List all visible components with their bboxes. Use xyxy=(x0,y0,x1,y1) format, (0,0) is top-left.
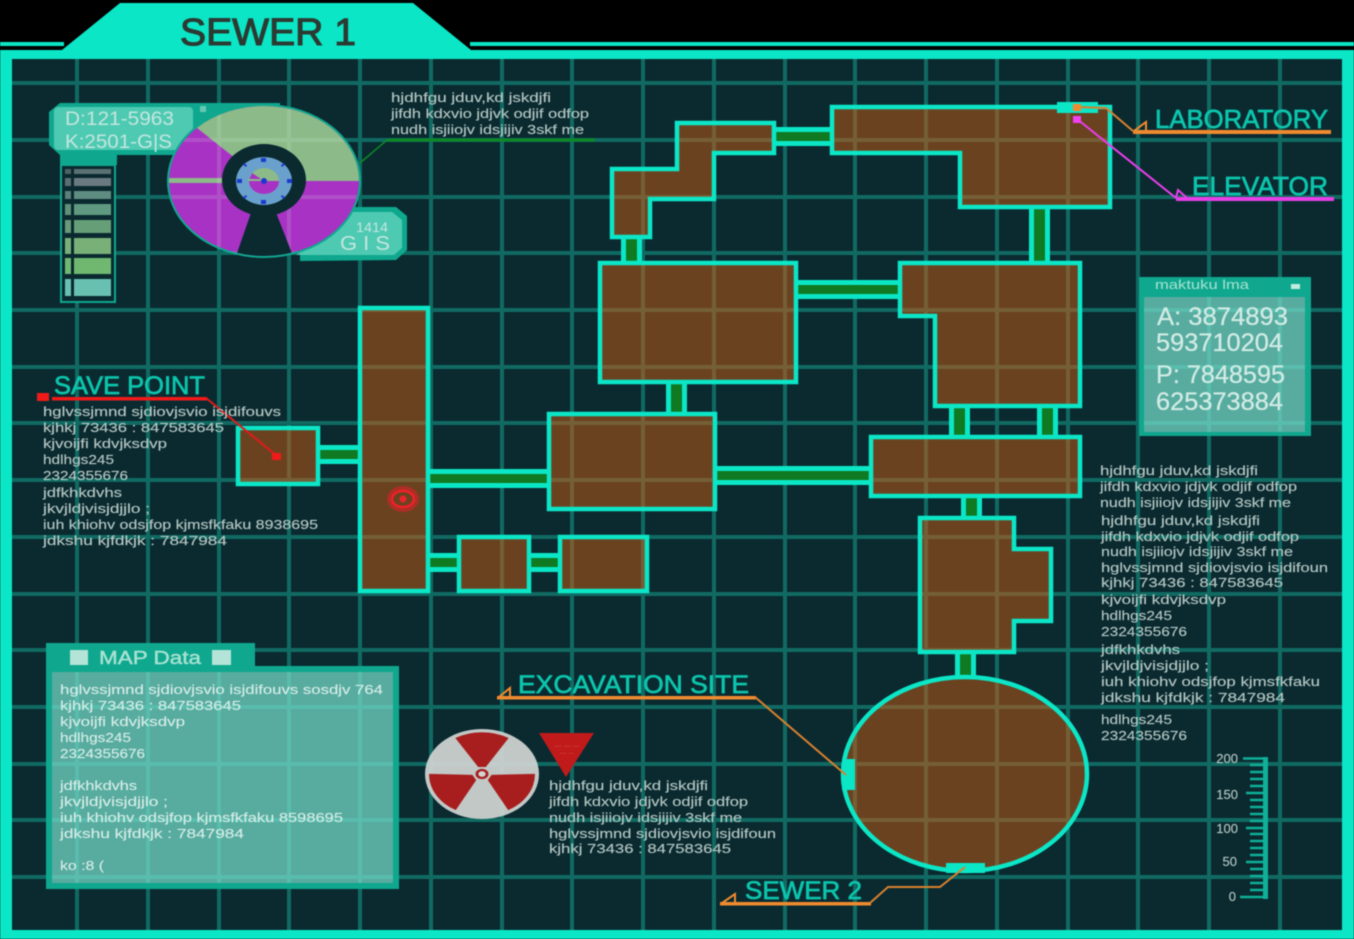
panel text: ko :8 ( xyxy=(60,858,105,873)
level bars xyxy=(61,165,115,302)
panel text: kjvoijfi kdvjksdvp xyxy=(60,714,185,729)
text block: excavation notes xyxy=(548,778,776,856)
icon: warning triangle xyxy=(539,733,594,777)
text block: excavation notes: kjhkj 73436 : 847583645 xyxy=(549,841,731,856)
dial gauge xyxy=(160,100,365,260)
icon: radiation symbol xyxy=(423,729,541,819)
panel: GIS plate: 1414 xyxy=(356,219,388,235)
text block: save point details: kjvoijfi kdvjksdvp xyxy=(43,436,167,451)
panel numbers: 593710204 xyxy=(1156,329,1283,357)
label: save point xyxy=(37,372,281,460)
label: elevator xyxy=(1073,116,1334,201)
text block: right column: 2324355676 xyxy=(1101,728,1187,743)
panel: GIS plate xyxy=(296,207,407,261)
text block: save point details: jkvjldjvisjdjjlo ; xyxy=(42,501,150,516)
label: elevator: ELEVATOR xyxy=(1192,171,1328,201)
text block: right column: jdkshu kjfdkjk : 7847984 xyxy=(1100,690,1285,705)
map room outlines xyxy=(238,107,1110,871)
panel: ID plate xyxy=(49,103,280,165)
panel: MAP Data xyxy=(46,643,396,886)
panel text: jdkshu kjfdkjk : 7847984 xyxy=(59,826,244,841)
ruler labels xyxy=(1216,751,1238,904)
text block: top note: jifdh kdxvio jdjvk odjif odfop xyxy=(390,106,589,121)
text block: right column: 2324355676 xyxy=(1101,624,1187,639)
panel numbers: A: 3874893 xyxy=(1157,303,1288,331)
text block: right column: hjdhfgu jduv,kd jskdjfi xyxy=(1100,463,1258,478)
text block: right column: kjhkj 73436 : 847583645 xyxy=(1101,575,1283,590)
label: sewer 2: SEWER 2 xyxy=(745,877,862,905)
text block: save point details: jdfkhkdvhs xyxy=(42,485,123,500)
panel text: jdfkhkdvhs xyxy=(59,778,138,793)
scale ruler xyxy=(1216,751,1268,904)
text block: right column: jifdh kdxvio jdjvk odjif odfop xyxy=(1099,479,1297,494)
ruler labels: 0 xyxy=(1229,889,1236,904)
map room floors xyxy=(238,107,1110,871)
ID text: K:2501-G|S xyxy=(65,132,172,153)
ruler labels: 100 xyxy=(1216,821,1238,836)
text block: save point details: hdlhgs245 xyxy=(43,452,114,467)
map corridors xyxy=(318,127,1058,680)
label: excavation site: EXCAVATION SITE xyxy=(518,671,749,699)
text block: right column: iuh khiohv odsjfop kjmsfkfaku xyxy=(1101,674,1320,689)
panel tab xyxy=(46,643,255,668)
panel text: iuh khiohv odsjfop kjmsfkfaku 8598695 xyxy=(60,810,343,825)
title: SEWER 1 xyxy=(180,12,356,54)
text block: save point details xyxy=(42,404,318,548)
panel text: jkvjldjvisjdjjlo ; xyxy=(59,794,168,809)
room doors xyxy=(842,102,1098,873)
label: laboratory: LABORATORY xyxy=(1155,104,1328,134)
ruler labels: 200 xyxy=(1216,751,1238,766)
panel text: hglvssjmnd sjdiovjsvio isjdifouvs sosdjv 764 xyxy=(60,682,383,697)
text block: save point details: jdkshu kjfdkjk : 7847984 xyxy=(42,533,227,548)
panel: maktuku lma: maktuku lma xyxy=(1155,277,1250,292)
icon: warning triangle: --- -- xyxy=(560,750,574,755)
text block: top note: hjdhfgu jduv,kd jskdjfi xyxy=(391,90,551,105)
panel text: hdlhgs245 xyxy=(60,730,131,745)
text block: right column: hjdhfgu jduv,kd jskdjfi xyxy=(1101,513,1260,528)
ruler labels: 150 xyxy=(1216,787,1238,802)
panel numbers: 625373884 xyxy=(1156,388,1283,416)
text block: right column: hdlhgs245 xyxy=(1101,712,1172,727)
green leader line xyxy=(360,140,595,163)
text block: excavation notes: hglvssjmnd sjdiovjsvio isjdifoun xyxy=(549,826,776,841)
label: excavation site xyxy=(497,671,846,775)
text block: top note xyxy=(390,90,589,137)
text block: right column: jifdh kdxvio jdjvk odjif odfop xyxy=(1100,529,1299,544)
label: sewer 2 xyxy=(720,867,965,906)
panel tab: MAP Data xyxy=(99,648,202,668)
ID text: D:121-5963 xyxy=(65,109,174,130)
text block: right column: kjvoijfi kdvjksdvp xyxy=(1101,592,1226,607)
panel text: kjhkj 73436 : 847583645 xyxy=(60,698,241,713)
text block: save point details: 2324355676 xyxy=(43,468,128,483)
red target marker xyxy=(387,486,419,512)
panel text: 2324355676 xyxy=(60,746,145,761)
text block: excavation notes: nudh isjiiojv idsjijiv 3skf me xyxy=(549,810,742,825)
ID text xyxy=(65,109,174,153)
text block: top note: nudh isjiiojv idsjijiv 3skf me xyxy=(391,122,584,137)
panel numbers xyxy=(1156,303,1288,416)
panel: GIS plate: G I S xyxy=(340,233,390,255)
text block: right column: nudh isjiiojv idsjijiv 3skf me xyxy=(1100,495,1291,510)
label: save point: SAVE POINT xyxy=(54,372,205,400)
text block: right column: hglvssjmnd sjdiovjsvio isjdifoun xyxy=(1101,560,1328,575)
text block: excavation notes: hjdhfgu jduv,kd jskdjfi xyxy=(549,778,708,793)
label: laboratory xyxy=(1073,104,1331,134)
text block: save point details: kjhkj 73436 : 847583645 xyxy=(43,420,224,435)
text block: right column: hdlhgs245 xyxy=(1101,608,1172,623)
text block: save point details: iuh khiohv odsjfop kjmsfkfaku 8938695 xyxy=(43,517,318,532)
panel text xyxy=(59,682,383,873)
ruler labels: 50 xyxy=(1223,854,1237,869)
panel numbers: P: 7848595 xyxy=(1156,361,1285,389)
text block: right column xyxy=(1099,463,1328,743)
panel: maktuku lma xyxy=(1139,277,1311,436)
text block: right column: nudh isjiiojv idsjijiv 3skf me xyxy=(1101,544,1293,559)
text block: save point details: hglvssjmnd sjdiovjsvio isjdifouvs xyxy=(43,404,282,419)
icon: warning triangle: --- --- --- xyxy=(555,743,580,748)
text block: excavation notes: jifdh kdxvio jdjvk odjif odfop xyxy=(548,794,748,809)
text block: right column: jkvjldjvisjdjjlo ; xyxy=(1100,658,1209,673)
text block: right column: jdfkhkdvhs xyxy=(1100,642,1181,657)
